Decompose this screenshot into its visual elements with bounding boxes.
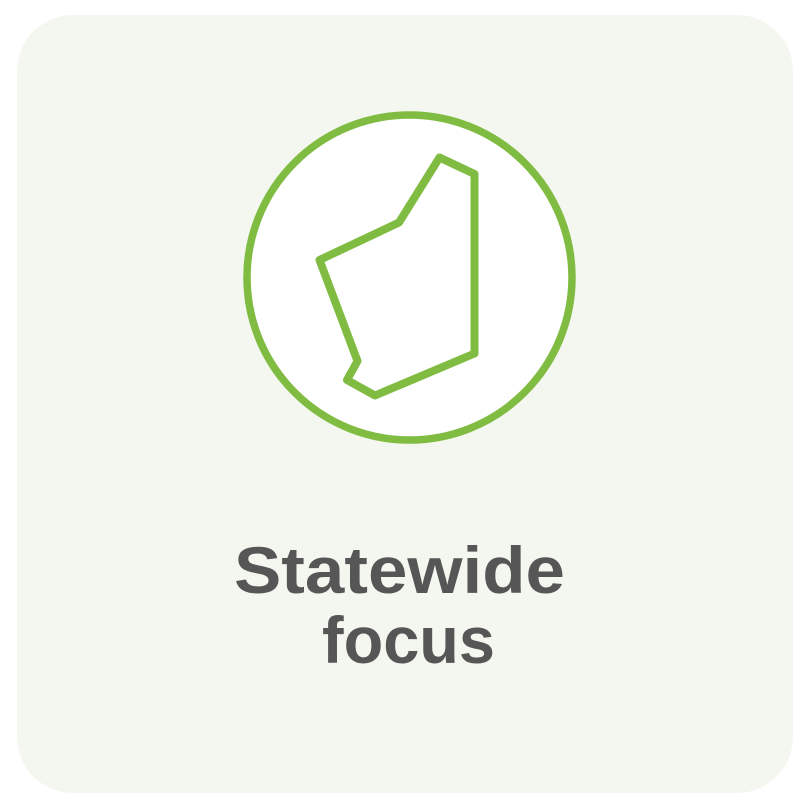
heading: Statewide focus: Statewide <box>234 533 565 607</box>
heading: Statewide focus: focus <box>322 603 495 677</box>
heading: Statewide focus <box>234 533 565 677</box>
icon: Western Australia outline in circle <box>247 115 572 440</box>
